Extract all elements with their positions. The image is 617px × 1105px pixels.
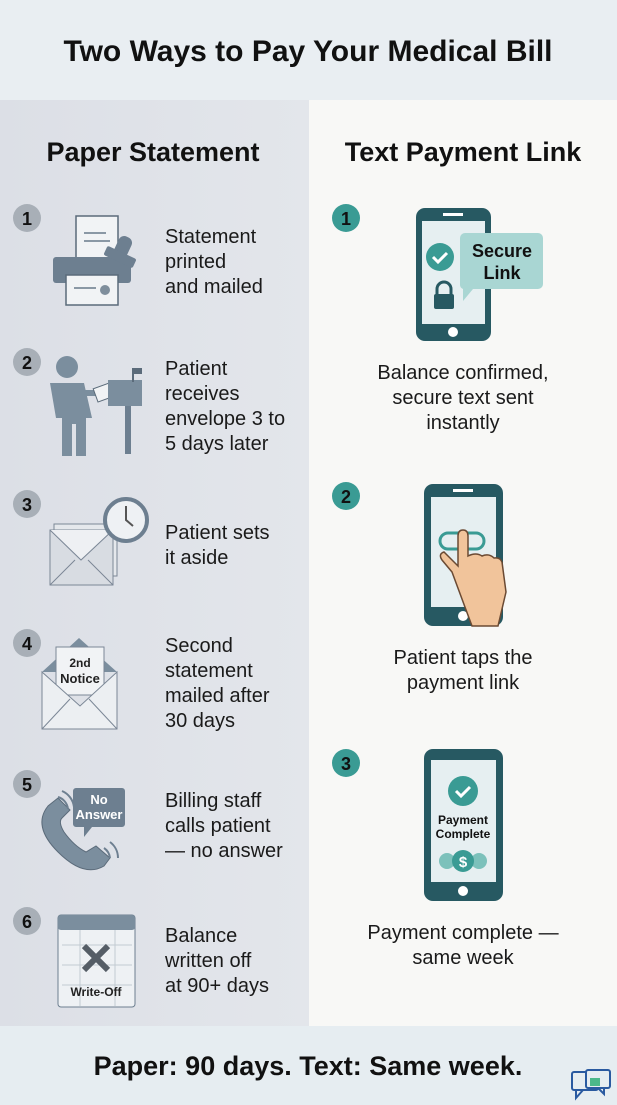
step 4 [13, 629, 270, 732]
step 2: Patient [165, 358, 228, 380]
right step 3: Payment [438, 813, 488, 827]
right step 1 [332, 204, 549, 434]
step 1: 1 [22, 209, 32, 229]
step 3: it aside [165, 547, 228, 569]
step 5: 5 [22, 775, 32, 795]
step 4: mailed after [165, 685, 270, 707]
right step 1: Balance confirmed, [377, 362, 549, 384]
step 1: Statement [165, 226, 257, 248]
right step 1: Secure [472, 241, 532, 261]
right step 1: 1 [341, 209, 351, 229]
step 2 [13, 348, 285, 456]
step 6 [13, 907, 269, 1007]
footer band [0, 1026, 617, 1105]
step 1: printed [165, 251, 226, 273]
footer summary: Paper: 90 days. Text: Same week. [94, 1051, 522, 1081]
right step 1: secure text sent [392, 387, 534, 409]
step 4: 30 days [165, 710, 235, 732]
step 6: written off [164, 950, 252, 972]
step 5: Answer [76, 807, 122, 822]
step 4: 4 [22, 634, 32, 654]
right step 2: 2 [341, 487, 351, 507]
panel: paper statement [0, 100, 309, 1026]
right step 3: Complete [436, 827, 491, 841]
step 4: 2nd [69, 656, 91, 670]
step 3: Patient sets [165, 522, 270, 544]
right step 3: 3 [341, 754, 351, 774]
right step 1: Link [483, 263, 521, 283]
step 5: calls patient [165, 815, 271, 837]
step 6: Balance [165, 925, 237, 947]
step 2: receives [165, 383, 239, 405]
title: Two Ways to Pay Your Medical Bill [64, 35, 552, 68]
heading: Text Payment Link: Text Payment Link [345, 137, 582, 167]
right step 2: payment link [407, 672, 520, 694]
step 5: — no answer [165, 840, 283, 862]
right step 3: $ [459, 854, 468, 871]
step 1 [13, 204, 263, 305]
right step 3: Payment complete — [367, 922, 559, 944]
step 5: No [90, 792, 108, 807]
step 6: 6 [22, 912, 32, 932]
step 2: 5 days later [165, 433, 269, 455]
step 5 [13, 770, 283, 870]
step 2: envelope 3 to [165, 408, 285, 430]
step 5: Billing staff [165, 790, 262, 812]
step 2: 2 [22, 353, 32, 373]
right step 2 [332, 482, 532, 694]
right step 1: instantly [426, 412, 500, 434]
step 3: 3 [22, 495, 32, 515]
right step 3 [332, 749, 559, 969]
step 4: statement [165, 660, 253, 682]
step 6: at 90+ days [165, 975, 269, 997]
step 1: and mailed [165, 276, 263, 298]
step 3 [13, 490, 270, 585]
header band [0, 0, 617, 100]
right step 3: same week [412, 947, 515, 969]
icon: chat bubbles [572, 1070, 610, 1098]
right step 2: Patient taps the [394, 647, 532, 669]
step 4: Second [165, 635, 233, 657]
step 4: Notice [60, 671, 100, 686]
step 6: Write-Off [70, 985, 123, 999]
heading: Paper Statement: Paper Statement [46, 137, 260, 167]
panel: text payment link [309, 100, 617, 1026]
